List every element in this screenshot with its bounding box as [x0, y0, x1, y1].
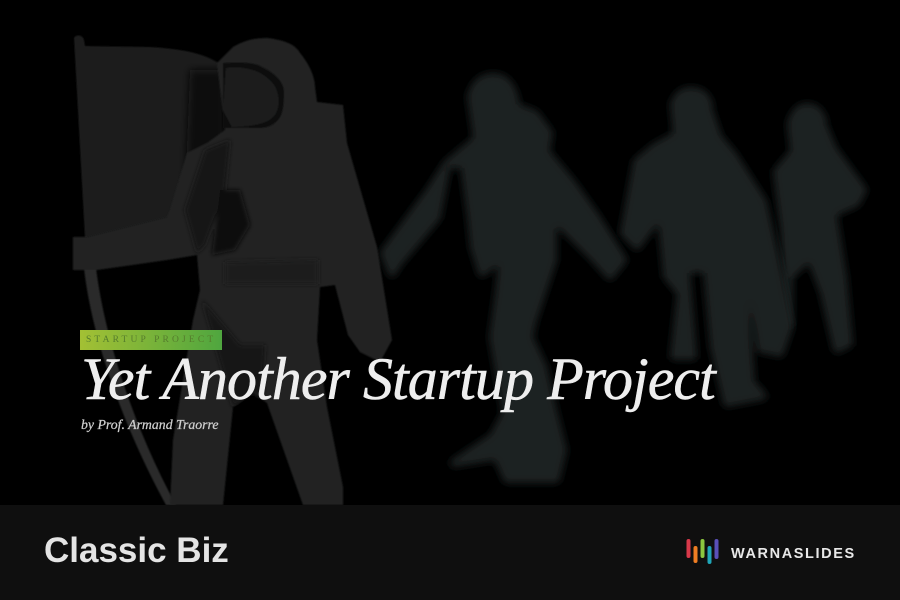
byline: by Prof. Armand Traorre: [81, 417, 218, 432]
blurred astronaut 1: [384, 77, 623, 479]
tag: startup project: STARTUP PROJECT: [86, 335, 216, 345]
tag: startup project: [80, 330, 222, 350]
flag pole: [84, 268, 176, 505]
title: Yet Another Startup Project: [81, 346, 715, 412]
face: [223, 68, 278, 127]
logo: Warnaslides: [686, 539, 856, 564]
blurred astronaut 3: [777, 107, 863, 349]
flag: [74, 36, 222, 238]
astronaut with flag: [73, 36, 392, 505]
visor: [223, 62, 284, 128]
astronaut body: [73, 38, 392, 505]
footer title: Classic Biz: [44, 531, 229, 570]
icon: coloured bars: [686, 539, 718, 564]
chest shadows: [185, 140, 318, 407]
footer bar: [0, 505, 900, 600]
suit silhouette: [73, 38, 392, 505]
blurred astronaut 2: [624, 91, 789, 403]
brand name: WARNASLIDES: [731, 546, 856, 562]
flag shadow: [185, 70, 225, 195]
